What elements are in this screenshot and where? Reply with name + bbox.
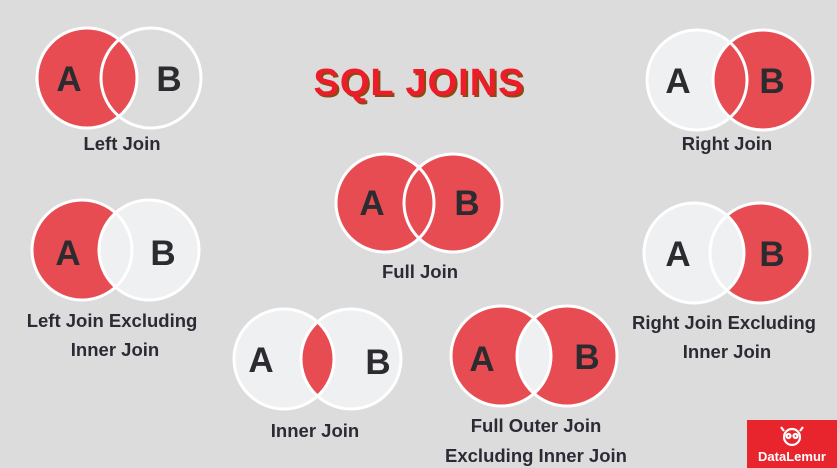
venn: inner join: A <box>248 341 274 380</box>
title: SQL JOINS <box>315 64 527 106</box>
venn: full join <box>336 154 502 282</box>
venn: right join: B <box>759 62 785 101</box>
venn: left join: B <box>156 60 182 99</box>
venn: left join: A <box>56 60 82 99</box>
venn: full join: B <box>454 184 480 223</box>
venn: inner join <box>234 309 401 441</box>
logo: DataLemur <box>747 420 837 468</box>
venn: right join excluding inner <box>632 203 816 362</box>
label: full outer excluding: Excluding Inner Join <box>445 445 627 466</box>
title: SQL JOINS <box>313 62 525 104</box>
venn: right join excluding inner: A <box>665 235 691 274</box>
logo: DataLemur: DataLemur <box>758 449 826 464</box>
venn: left join excluding inner <box>27 200 199 360</box>
label: left join excluding: Inner Join <box>71 339 159 360</box>
label: inner join: Inner Join <box>271 420 359 441</box>
label: left join excluding <box>27 310 197 360</box>
label: right join excluding: Inner Join <box>683 341 771 362</box>
label: full join: Full Join <box>382 261 458 282</box>
venn: left join <box>37 28 201 154</box>
venn: full outer excluding inner: A <box>469 340 495 379</box>
label: left join excluding: Left Join Excluding <box>27 310 197 331</box>
label: full outer excluding: Full Outer Join <box>471 415 601 436</box>
label: right join excluding: Right Join Excluding <box>632 312 816 333</box>
label: left join: Left Join <box>83 133 161 154</box>
label: full outer excluding <box>445 415 627 466</box>
venn: full outer excluding inner <box>445 306 627 466</box>
venn: inner join: B <box>365 343 391 382</box>
venn: left join excluding inner: B <box>150 234 176 273</box>
label: right join: Right Join <box>682 133 772 154</box>
venn: full join: A <box>359 184 385 223</box>
icon: lemur <box>781 427 803 445</box>
venn: right join: A <box>665 62 691 101</box>
venn: full outer excluding inner: B <box>574 338 600 377</box>
label: right join excluding <box>632 312 816 362</box>
venn: right join <box>647 30 813 154</box>
venn: left join excluding inner: A <box>55 234 81 273</box>
venn: right join excluding inner: B <box>759 235 785 274</box>
